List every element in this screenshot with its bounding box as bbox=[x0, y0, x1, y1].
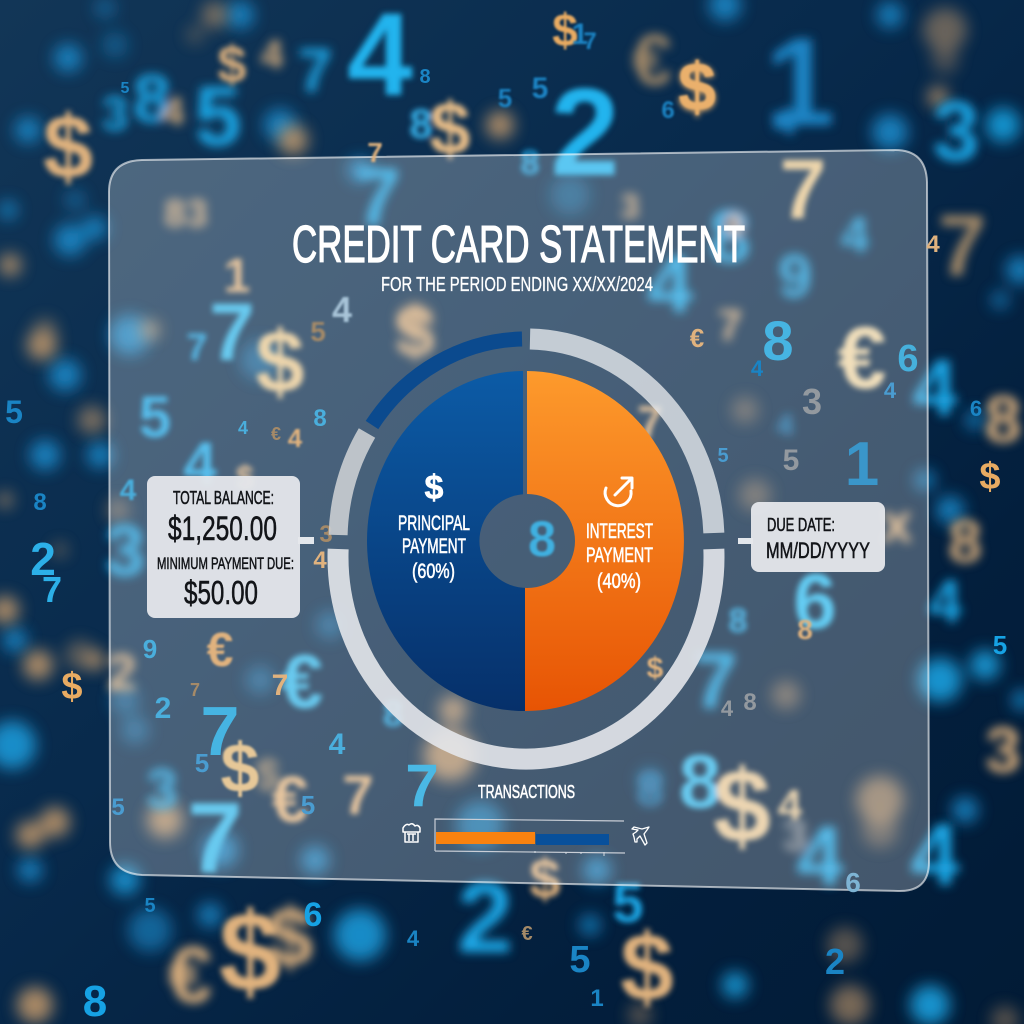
background: blurred digits and currency: x bbox=[881, 491, 913, 554]
panel: in-focus digits resting on the glass: € bbox=[207, 624, 233, 677]
background: blurred digits and currency: € bbox=[168, 930, 212, 1019]
panel: in-focus digits resting on the glass: 3 bbox=[319, 521, 333, 548]
panel: in-focus digits resting on the glass: 7 bbox=[405, 752, 439, 819]
background: blurred digits and currency: 4 bbox=[911, 805, 960, 904]
panel: in-focus digits resting on the glass: 4 bbox=[313, 547, 327, 574]
callout: balance and minimum payment: TOTAL BALANCE: bbox=[173, 488, 274, 508]
panel: in-focus digits resting on the glass: 8 bbox=[313, 405, 327, 432]
callout: balance and minimum payment bbox=[147, 476, 314, 618]
background: blurred digits and currency: 6 bbox=[727, 209, 743, 242]
label: principal payment bbox=[398, 512, 470, 583]
label: interest payment: PAYMENT bbox=[586, 544, 653, 567]
panel: in-focus digits resting on the glass: 5 bbox=[532, 72, 548, 105]
panel: in-focus digits resting on the glass: 4 bbox=[926, 231, 940, 258]
background: near-focus digits and currency: 8 bbox=[521, 144, 539, 182]
background: blurred digits and currency: 7 bbox=[355, 152, 401, 243]
panel: in-focus digits resting on the glass: 4 bbox=[407, 926, 420, 951]
background: near-focus digits and currency: 5 bbox=[139, 385, 171, 450]
background: blurred digits and currency: 2 bbox=[457, 862, 513, 974]
background: blurred digits and currency: 8 bbox=[948, 508, 982, 575]
background: near-focus digits and currency: 6 bbox=[793, 557, 837, 645]
background: near-focus digits and currency: € bbox=[281, 640, 323, 725]
background: near-focus digits and currency: $ bbox=[713, 749, 771, 865]
panel: in-focus digits resting on the glass: 4 bbox=[329, 728, 346, 761]
panel: in-focus digits resting on the glass: $ bbox=[61, 666, 83, 708]
panel: in-focus digits resting on the glass: 1 bbox=[572, 18, 588, 51]
panel: in-focus digits resting on the glass: 2 bbox=[155, 692, 171, 725]
panel: in-focus digits resting on the glass: 7 bbox=[42, 569, 62, 610]
panel: in-focus digits resting on the glass: 1 bbox=[845, 430, 879, 499]
panel: in-focus digits resting on the glass: 7 bbox=[583, 28, 597, 55]
background: blurred digits and currency: 7 bbox=[693, 636, 737, 725]
panel: in-focus digits resting on the glass: 6 bbox=[970, 396, 982, 421]
chart: blurred digit in donut hole: 8 bbox=[528, 511, 556, 567]
background: blurred digits and currency: 8 bbox=[164, 193, 186, 235]
background: near-focus digits and currency: 7 bbox=[780, 142, 826, 236]
label: interest payment: INTEREST bbox=[586, 520, 653, 543]
panel: frosted glass card bbox=[109, 150, 929, 891]
background: near-focus digits and currency: 7 bbox=[209, 287, 255, 378]
background: near-focus digits and currency: $ bbox=[256, 312, 304, 411]
panel: in-focus digits resting on the glass: 5 bbox=[569, 939, 591, 981]
background: blurred digits and currency: 3 bbox=[933, 84, 979, 178]
icon: shopping basket bbox=[403, 824, 420, 842]
panel: in-focus digits resting on the glass: € bbox=[690, 323, 704, 353]
label: principal payment: (60%) bbox=[412, 560, 455, 583]
panel: in-focus digits resting on the glass: 5 bbox=[783, 444, 799, 477]
background: blurred digits and currency: 3 bbox=[105, 511, 145, 591]
background: blurred digits and currency: 7 bbox=[298, 37, 332, 106]
panel: in-focus digits resting on the glass: 2 bbox=[30, 533, 56, 585]
background: blurred digits and currency: 3 bbox=[102, 88, 128, 141]
panel: in-focus digits resting on the glass: 4 bbox=[884, 378, 897, 403]
background: near-focus digits and currency: 7 bbox=[637, 396, 663, 448]
background: blurred digits and currency: 7 bbox=[938, 198, 986, 294]
panel: in-focus digits resting on the glass: 6 bbox=[304, 896, 322, 934]
panel: in-focus digits resting on the glass: 4 bbox=[288, 423, 303, 453]
background: near-focus digits and currency: 8 bbox=[729, 602, 747, 640]
background: near-focus digits and currency: 2 bbox=[551, 64, 619, 202]
background: blurred digits and currency: 4 bbox=[841, 207, 869, 263]
panel: in-focus digits resting on the glass: 8 bbox=[762, 309, 794, 372]
callout: balance and minimum payment: MINIMUM PAYMENT DUE: bbox=[157, 554, 294, 573]
heading: transactions: TRANSACTIONS bbox=[478, 782, 575, 802]
background: near-focus digits and currency: 4 bbox=[778, 781, 803, 830]
background: near-focus digits and currency: 4 bbox=[183, 430, 217, 497]
background: blurred digits and currency: 4 bbox=[647, 239, 693, 330]
chart: principal payment slice bbox=[367, 371, 525, 711]
label: interest payment: (40%) bbox=[597, 570, 641, 593]
chart: interest payment slice bbox=[525, 371, 684, 711]
callout: balance and minimum payment: $50.00 bbox=[184, 574, 258, 611]
panel: in-focus digits resting on the glass: 8 bbox=[743, 689, 757, 716]
background: near-focus digits and currency: 7 bbox=[186, 327, 208, 369]
background: near-focus digits and currency: € bbox=[272, 762, 308, 836]
background: blurred digits and currency: 5 bbox=[195, 69, 241, 163]
background: near-focus digits and currency: 5 bbox=[612, 871, 644, 934]
panel: in-focus digits resting on the glass: € bbox=[271, 424, 281, 444]
background: near-focus digits and currency: $ bbox=[219, 889, 281, 1014]
panel: in-focus digits resting on the glass: 5 bbox=[195, 748, 209, 778]
background: near-focus digits and currency: $ bbox=[236, 459, 254, 495]
panel: in-focus digits resting on the glass: 5 bbox=[111, 794, 125, 821]
panel: in-focus digits resting on the glass: 7 bbox=[367, 137, 383, 168]
background: blurred digits and currency: 3 bbox=[783, 811, 807, 860]
panel: in-focus digits resting on the glass: 5 bbox=[121, 80, 130, 97]
background: blurred digits and currency: 7 bbox=[718, 301, 742, 350]
background: blurred digits and currency: 9 bbox=[778, 243, 812, 310]
panel: in-focus digits resting on the glass: $ bbox=[552, 4, 578, 56]
background: near-focus digits and currency: $ bbox=[620, 914, 674, 1021]
background: blurred digits and currency: 3 bbox=[186, 193, 208, 235]
panel: in-focus digits resting on the glass: 7 bbox=[201, 692, 239, 770]
panel: in-focus digits resting on the glass: 5 bbox=[5, 394, 23, 430]
icon: dollar sign: $ bbox=[425, 469, 444, 507]
background: near-focus digits and currency: € bbox=[838, 308, 886, 407]
label: interest payment bbox=[586, 520, 653, 593]
panel: in-focus digits resting on the glass: 2 bbox=[825, 941, 845, 982]
background: near-focus digits and currency: $ bbox=[429, 87, 471, 170]
panel: in-focus digits resting on the glass: 4 bbox=[120, 474, 137, 507]
callout: balance and minimum payment: $1,250.00 bbox=[168, 510, 277, 548]
panel: in-focus digits resting on the glass: 9 bbox=[143, 634, 157, 664]
background: blurred digits and currency: 4 bbox=[162, 90, 185, 134]
background: blurred digits and currency: 8 bbox=[637, 763, 663, 815]
panel: in-focus digits resting on the glass: 7 bbox=[272, 669, 288, 702]
label: principal payment: PAYMENT bbox=[402, 535, 466, 558]
panel: in-focus digits resting on the glass: 5 bbox=[310, 316, 326, 347]
background: near-focus digits and currency: 8 bbox=[679, 740, 721, 825]
panel: in-focus digits resting on the glass: 6 bbox=[897, 338, 919, 380]
background: blurred digits and currency: € bbox=[632, 21, 672, 101]
panel: in-focus digits resting on the glass: 5 bbox=[993, 630, 1007, 660]
panel: in-focus digits resting on the glass: 4 bbox=[721, 696, 734, 721]
background: blurred digits and currency: 4 bbox=[797, 809, 844, 903]
icon: airplane bbox=[632, 827, 649, 845]
background: blurred digits and currency: 8 bbox=[709, 195, 751, 278]
background: near-focus digits and currency: 1 bbox=[224, 250, 250, 303]
panel: in-focus digits resting on the glass: 5 bbox=[498, 83, 512, 113]
panel: in-focus digits resting on the glass: 6 bbox=[845, 867, 861, 898]
background: blurred digits and currency: 4 bbox=[777, 409, 794, 442]
panel: in-focus digits resting on the glass: $ bbox=[678, 49, 716, 125]
background: near-focus digits and currency: $ bbox=[43, 98, 93, 198]
background: blurred digits and currency: $ bbox=[256, 751, 280, 800]
background: blurred digits and currency: $ bbox=[267, 892, 313, 983]
background: near-focus digits and currency: 7 bbox=[187, 782, 243, 894]
background: blurred digits and currency: 8 bbox=[133, 61, 171, 137]
icon: interest arrow bbox=[605, 478, 632, 506]
background: blurred digits and currency: 4 bbox=[261, 33, 284, 77]
panel: in-focus digits resting on the glass: 5 bbox=[717, 445, 729, 467]
panel: in-focus digits resting on the glass: 7 bbox=[190, 680, 200, 700]
background: blurred digits and currency: 4 bbox=[774, 100, 797, 144]
subtitle: statement period: FOR THE PERIOD ENDING XX/XX/2024 bbox=[381, 274, 653, 296]
panel: in-focus digits resting on the glass: 5 bbox=[301, 790, 315, 820]
panel: in-focus digits resting on the glass: 8 bbox=[419, 66, 431, 88]
panel: in-focus digits resting on the glass: $ bbox=[979, 456, 1001, 498]
background: near-focus digits and currency: 7 bbox=[342, 763, 374, 826]
panel: in-focus digits resting on the glass: 4 bbox=[238, 418, 248, 438]
background: near-focus digits and currency: 8 bbox=[383, 693, 403, 734]
background: near-focus digits and currency: $ bbox=[218, 36, 247, 94]
panel: in-focus digits resting on the glass: 6 bbox=[661, 97, 675, 124]
callout: due date bbox=[738, 502, 885, 572]
panel: in-focus digits resting on the glass: 5 bbox=[144, 895, 156, 917]
panel: in-focus digits resting on the glass: € bbox=[521, 923, 533, 945]
panel: in-focus digits resting on the glass: 4 bbox=[751, 356, 764, 381]
panel: in-focus digits resting on the glass: 3 bbox=[802, 381, 822, 422]
background: blurred digits and currency: $ bbox=[396, 293, 434, 371]
panel: in-focus digits resting on the glass: 8 bbox=[797, 614, 813, 645]
bar chart: transactions bbox=[435, 819, 625, 856]
background: blurred digits and currency: 2 bbox=[108, 644, 136, 702]
background: blurred digits and currency: 3 bbox=[621, 188, 639, 226]
background: blurred digits and currency: 4 bbox=[913, 343, 958, 432]
label: principal payment: PRINCIPAL bbox=[398, 512, 470, 535]
title: CREDIT CARD STATEMENT bbox=[292, 216, 745, 274]
panel: in-focus digits resting on the glass: 4 bbox=[332, 289, 352, 330]
callout: due date: MM/DD/YYYY bbox=[766, 538, 870, 563]
callout: due date: DUE DATE: bbox=[767, 515, 835, 535]
background: blurred digits and currency: 8 bbox=[985, 382, 1021, 456]
background: near-focus digits and currency: $ bbox=[529, 847, 561, 910]
background: blurred digits and currency: 3 bbox=[146, 757, 178, 820]
panel: in-focus digits resting on the glass: 8 bbox=[33, 489, 47, 516]
background: blurred digits and currency: 3 bbox=[985, 714, 1021, 786]
panel: in-focus digits resting on the glass: 1 bbox=[590, 985, 604, 1012]
chart: outer segmented ring bbox=[338, 339, 714, 759]
panel: in-focus digits resting on the glass: $ bbox=[647, 652, 664, 685]
background: blurred digits and currency: 4 bbox=[928, 568, 962, 635]
background: near-focus digits and currency: 8 bbox=[409, 100, 433, 147]
panel: in-focus digits resting on the glass: $ bbox=[221, 729, 259, 807]
background: blurred digits and currency: 1 bbox=[765, 13, 835, 152]
background: near-focus digits and currency: $ bbox=[678, 49, 716, 127]
